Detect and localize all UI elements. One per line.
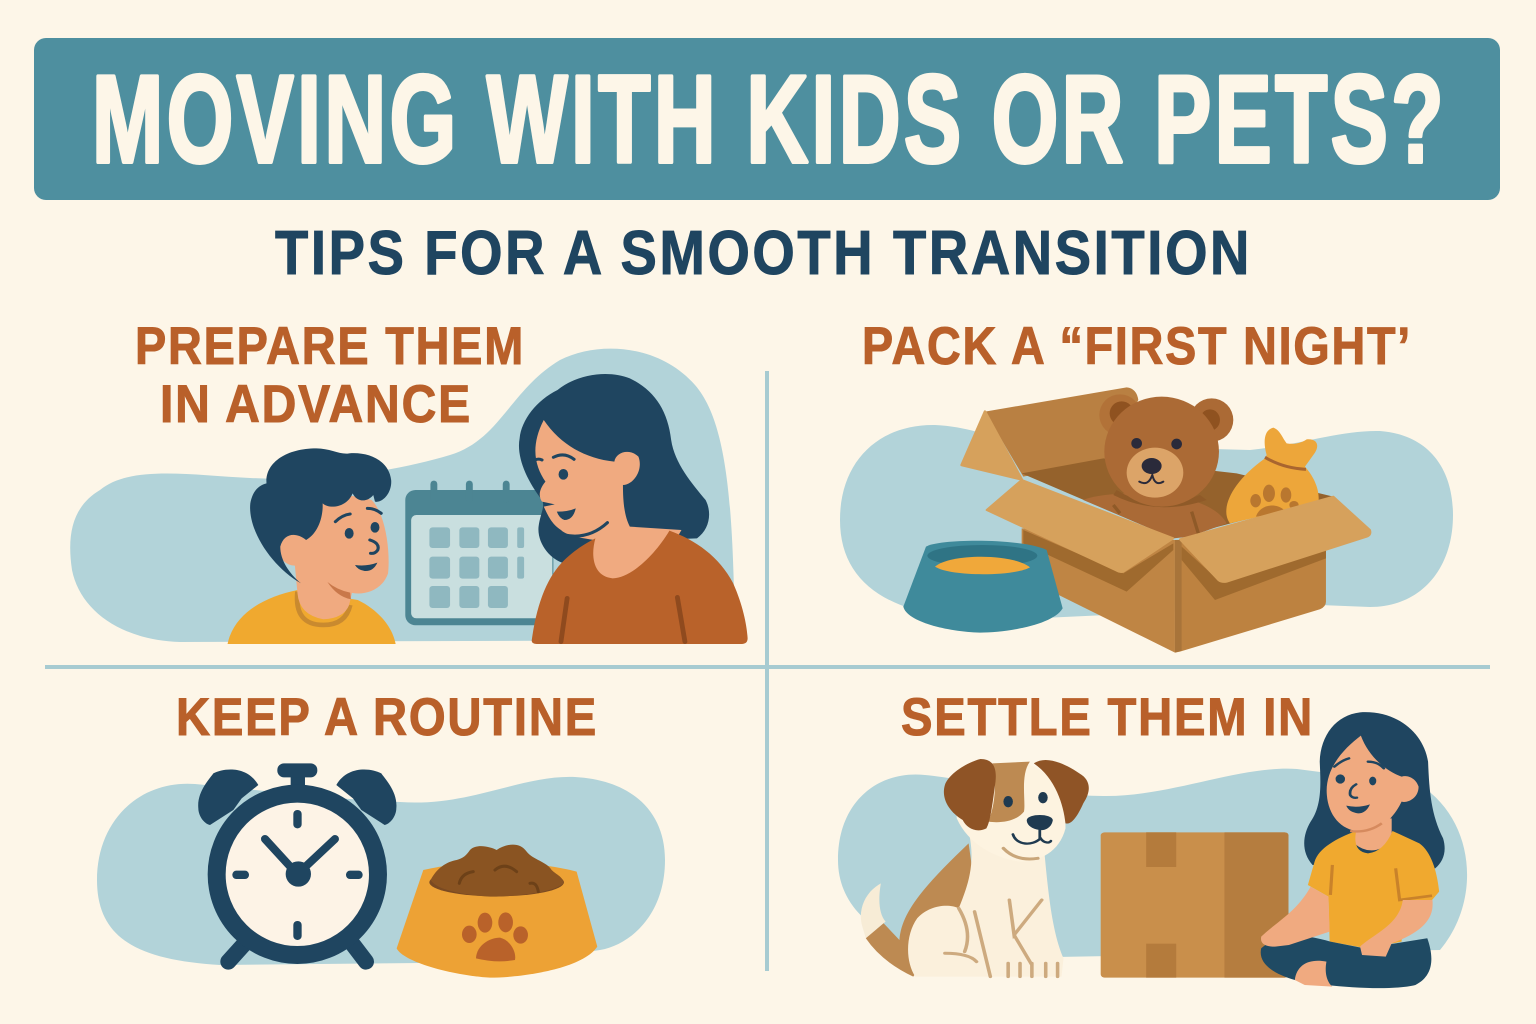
illustration: clock and food bowl xyxy=(198,763,597,978)
panel: settle them in xyxy=(838,688,1467,988)
icon: open cardboard box back xyxy=(962,387,1333,538)
icon: food bowl with paw xyxy=(397,845,597,978)
icon: dog xyxy=(861,759,1089,977)
icon: open cardboard box front xyxy=(987,480,1370,653)
icon: treat bag with paw xyxy=(1226,428,1319,523)
subtitle: TIPS FOR A SMOOTH TRANSITION xyxy=(275,219,1252,288)
illustration: dog, box and girl xyxy=(861,712,1445,988)
icon: boy xyxy=(228,448,396,644)
blob background xyxy=(838,769,1467,958)
heading: IN ADVANCE xyxy=(160,375,472,434)
panel: prepare them in advance xyxy=(70,317,748,644)
blob background xyxy=(70,349,735,642)
heading xyxy=(135,317,525,434)
illustration: box, bear, bag and bowl xyxy=(903,387,1370,653)
icon: cardboard box xyxy=(1101,832,1288,978)
blob background xyxy=(97,777,665,965)
heading: SETTLE THEM IN xyxy=(901,688,1314,747)
heading: PREPARE THEM xyxy=(135,317,525,376)
icon: alarm clock xyxy=(198,763,396,962)
heading: KEEP A ROUTINE xyxy=(176,688,598,747)
title banner xyxy=(34,38,1500,200)
icon: teddy bear xyxy=(1083,394,1233,538)
icon: calendar xyxy=(405,481,553,625)
blob background xyxy=(840,425,1453,620)
icon: mother xyxy=(519,374,748,644)
panel: pack a first night xyxy=(840,317,1453,653)
heading: PACK A “FIRST NIGHT’ xyxy=(862,317,1412,376)
panel dividers xyxy=(45,371,1490,971)
icon: pet bowl xyxy=(903,541,1063,633)
illustration: boy, calendar and mother xyxy=(228,374,748,644)
panel: keep a routine xyxy=(97,688,665,978)
icon: seated girl xyxy=(1261,712,1445,988)
